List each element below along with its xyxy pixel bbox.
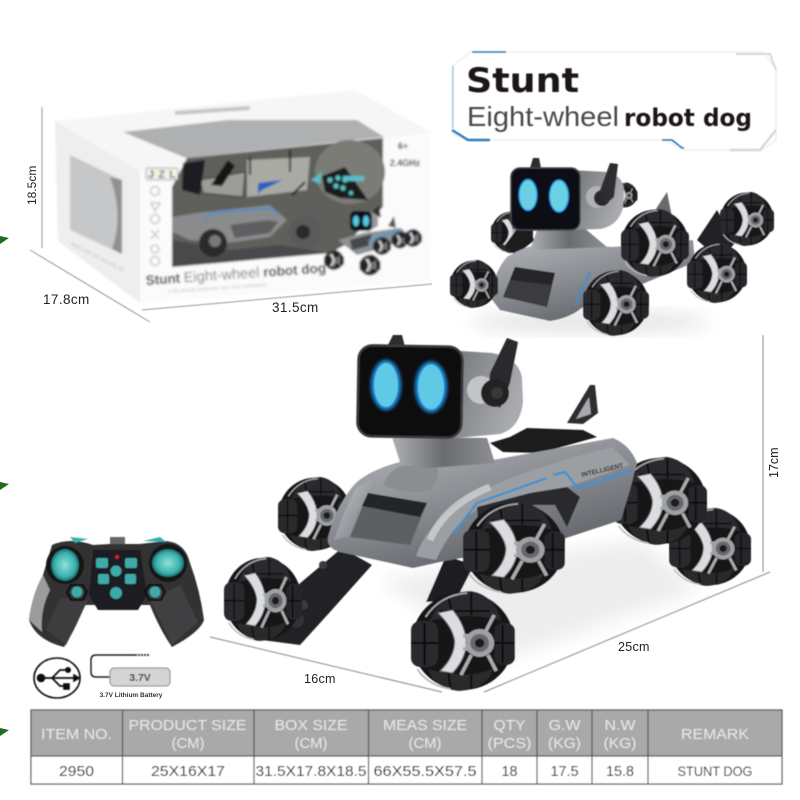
- box top face: [55, 90, 431, 171]
- table header labels: PRODUCT SIZE: [128, 717, 246, 734]
- left ear: [387, 335, 405, 347]
- box front face: [140, 132, 431, 303]
- table values: 17.5: [550, 763, 578, 780]
- box front window: [172, 138, 383, 267]
- table body background: [31, 756, 782, 784]
- central plate: [89, 550, 147, 610]
- box feature icons: [150, 186, 160, 266]
- screen: [511, 168, 580, 230]
- controller body: [29, 541, 204, 647]
- box top window: [123, 120, 384, 158]
- table values: STUNT DOG: [678, 763, 752, 779]
- label: robot length: 25cm: [618, 640, 650, 654]
- table values: 31.5X17.8X18.5: [256, 763, 366, 780]
- front wheels: [450, 260, 498, 308]
- head: [445, 350, 523, 439]
- back panel: [490, 428, 597, 453]
- shadow: [470, 312, 710, 332]
- icon: battery: 3.7V: [129, 672, 151, 684]
- table header labels: [41, 717, 749, 752]
- label: box depth: 17.8cm: [43, 292, 90, 307]
- ear left: [530, 158, 541, 168]
- table header background: [31, 710, 782, 756]
- main robot dog: [224, 335, 751, 691]
- head: [570, 170, 624, 230]
- right ear and pivot: [467, 376, 495, 404]
- table grid: [31, 710, 782, 784]
- remote controller: [29, 537, 204, 647]
- label: robot height: 17cm: [767, 447, 781, 478]
- table header labels: ITEM NO.: [41, 726, 112, 743]
- body shell: [328, 438, 637, 568]
- eyes: [371, 360, 447, 412]
- box subtitle: 2.4G remote control for your new companion: [168, 282, 267, 295]
- label: robot width: 16cm: [304, 672, 336, 686]
- box age and frequency labels: 6+: [398, 141, 408, 151]
- main dimension lines: [210, 335, 770, 692]
- tail: [567, 385, 598, 424]
- icon: green corner marks: [0, 236, 9, 736]
- badge frame: [452, 52, 776, 150]
- table values: [59, 763, 752, 780]
- shell highlight: [416, 447, 630, 560]
- table header labels: MEAS SIZE: [383, 717, 467, 734]
- front wheels: [224, 557, 302, 641]
- table header labels: (CM): [408, 735, 442, 752]
- box top label: [175, 108, 250, 113]
- icon: USB: [34, 658, 80, 698]
- table values: 15.8: [606, 763, 634, 780]
- joysticks: [46, 546, 84, 584]
- subheading: light part: Eight-wheel: [467, 101, 619, 132]
- back legs and wheels: [697, 210, 735, 260]
- panel: product box: [55, 90, 431, 303]
- table header labels: QTY: [494, 717, 526, 734]
- heading: Stunt: Stunt: [466, 61, 579, 101]
- table values: 2950: [59, 763, 94, 780]
- body badge text: INTELLIGENT: [581, 463, 624, 479]
- title badge: [452, 52, 776, 150]
- table values: 66X55.5X57.5: [374, 763, 476, 780]
- front tube: [334, 476, 378, 540]
- hump: [383, 465, 438, 492]
- icon: battery: [91, 655, 170, 686]
- specification table: [31, 710, 782, 784]
- box title: Stunt Eight-wheel robot dog: [145, 260, 327, 289]
- battery caption: 3.7V Lithium Battery: [100, 692, 163, 699]
- subheading: bold part: robot dog: [624, 104, 752, 132]
- box age and frequency labels: 2.4GHz: [390, 158, 421, 168]
- label: box height: 18.5cm: [25, 166, 39, 205]
- box mini robot: [324, 205, 422, 276]
- blue stripes: [453, 470, 633, 534]
- table header labels: (KG): [604, 735, 636, 752]
- neck: [392, 437, 495, 468]
- box age and frequency labels: [390, 141, 421, 168]
- table header labels: N.W: [604, 717, 636, 734]
- table header labels: (CM): [294, 735, 328, 752]
- table header labels: G.W: [548, 717, 581, 734]
- rear wheels: [278, 477, 352, 551]
- front slot: [350, 493, 427, 545]
- red LED: [115, 555, 119, 559]
- robot inside box: [172, 150, 368, 257]
- body: [490, 240, 695, 321]
- controller buttons: [72, 558, 160, 599]
- table values: 25X16X17: [151, 763, 225, 780]
- ear right: [586, 186, 608, 208]
- box left face: [55, 121, 140, 303]
- table header labels: (PCS): [488, 735, 532, 752]
- neck: [530, 227, 607, 250]
- eyes: [519, 180, 568, 212]
- table header labels: BOX SIZE: [274, 717, 348, 734]
- legs: [248, 548, 372, 645]
- label: box width: 31.5cm: [272, 300, 319, 315]
- box logo: JZL: [148, 169, 176, 181]
- small robot dog: [450, 158, 774, 336]
- table header labels: (KG): [548, 735, 581, 752]
- box side window: [70, 155, 122, 254]
- floor shadow: [380, 540, 700, 660]
- box dimension lines: [30, 107, 432, 322]
- box side caption: RED LINE OF FIGURE 3D: [69, 241, 125, 274]
- table header labels: REMARK: [681, 726, 749, 743]
- table header labels: (CM): [172, 735, 204, 752]
- tail: [652, 192, 672, 217]
- table values: 18: [502, 763, 518, 780]
- screen: [357, 345, 463, 438]
- side panel: [477, 487, 580, 527]
